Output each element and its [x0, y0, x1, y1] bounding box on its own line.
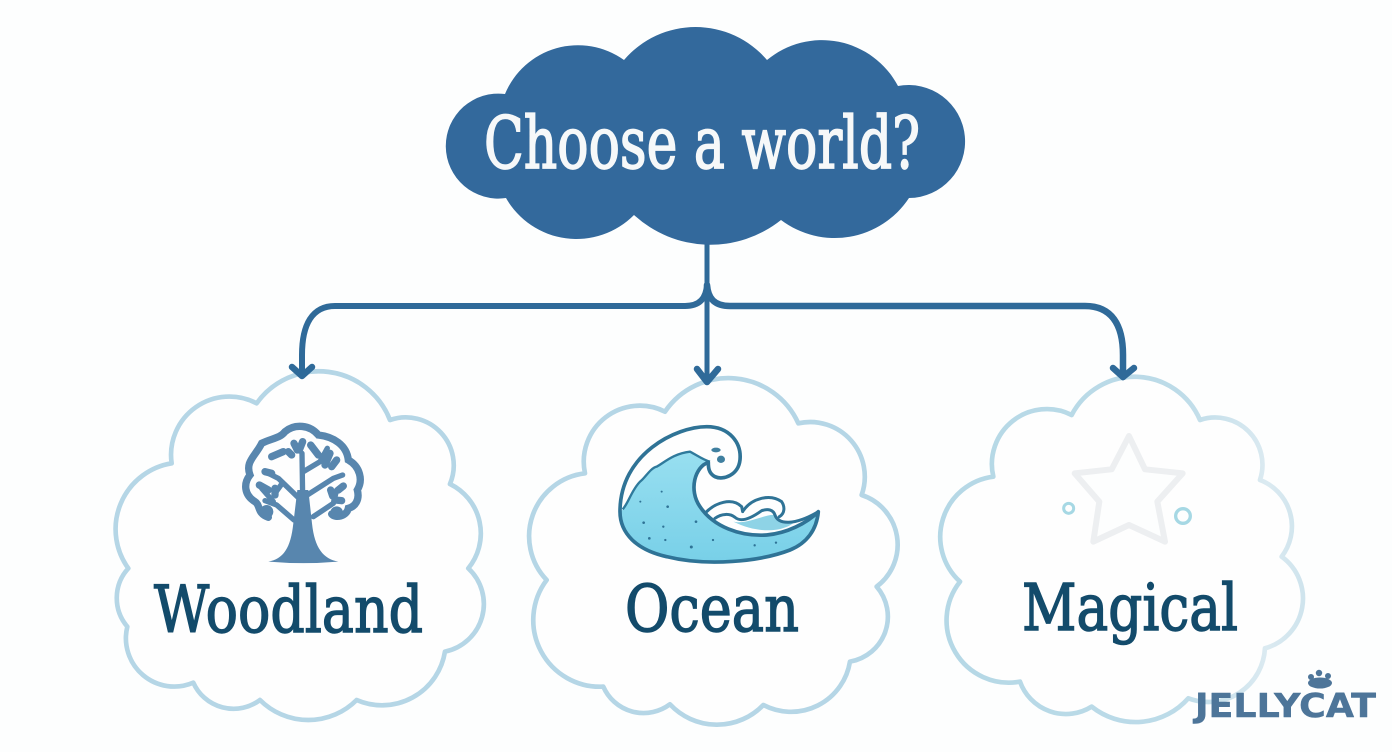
stem from main cloud	[704, 240, 710, 382]
main cloud	[446, 27, 965, 245]
heading: Choose a world?: Choose a world?	[484, 101, 920, 185]
label: Ocean: Ocean	[625, 572, 799, 647]
icon: tree	[246, 426, 360, 563]
icon: wave	[620, 427, 818, 562]
ocean cloud outline	[529, 378, 898, 725]
arrow: to woodland	[292, 285, 707, 376]
label: Magical: Magical	[1022, 571, 1238, 646]
arrow: to magical	[707, 285, 1134, 377]
main cloud shape	[446, 27, 965, 245]
woodland cloud outline	[116, 371, 484, 720]
connector arrows	[292, 240, 1134, 382]
logo: Jellycat	[1193, 670, 1377, 725]
logo paw	[1308, 670, 1332, 688]
icon: star with bubbles	[1064, 436, 1190, 542]
magical cloud outline	[940, 377, 1303, 722]
panel: magical cloud	[940, 377, 1303, 722]
label: Woodland: Woodland	[154, 573, 423, 648]
panel: woodland cloud	[116, 371, 484, 720]
arrow: to ocean	[697, 369, 718, 382]
panel: ocean cloud	[529, 378, 898, 725]
logo wordmark: JELLYCAT	[1193, 686, 1377, 725]
